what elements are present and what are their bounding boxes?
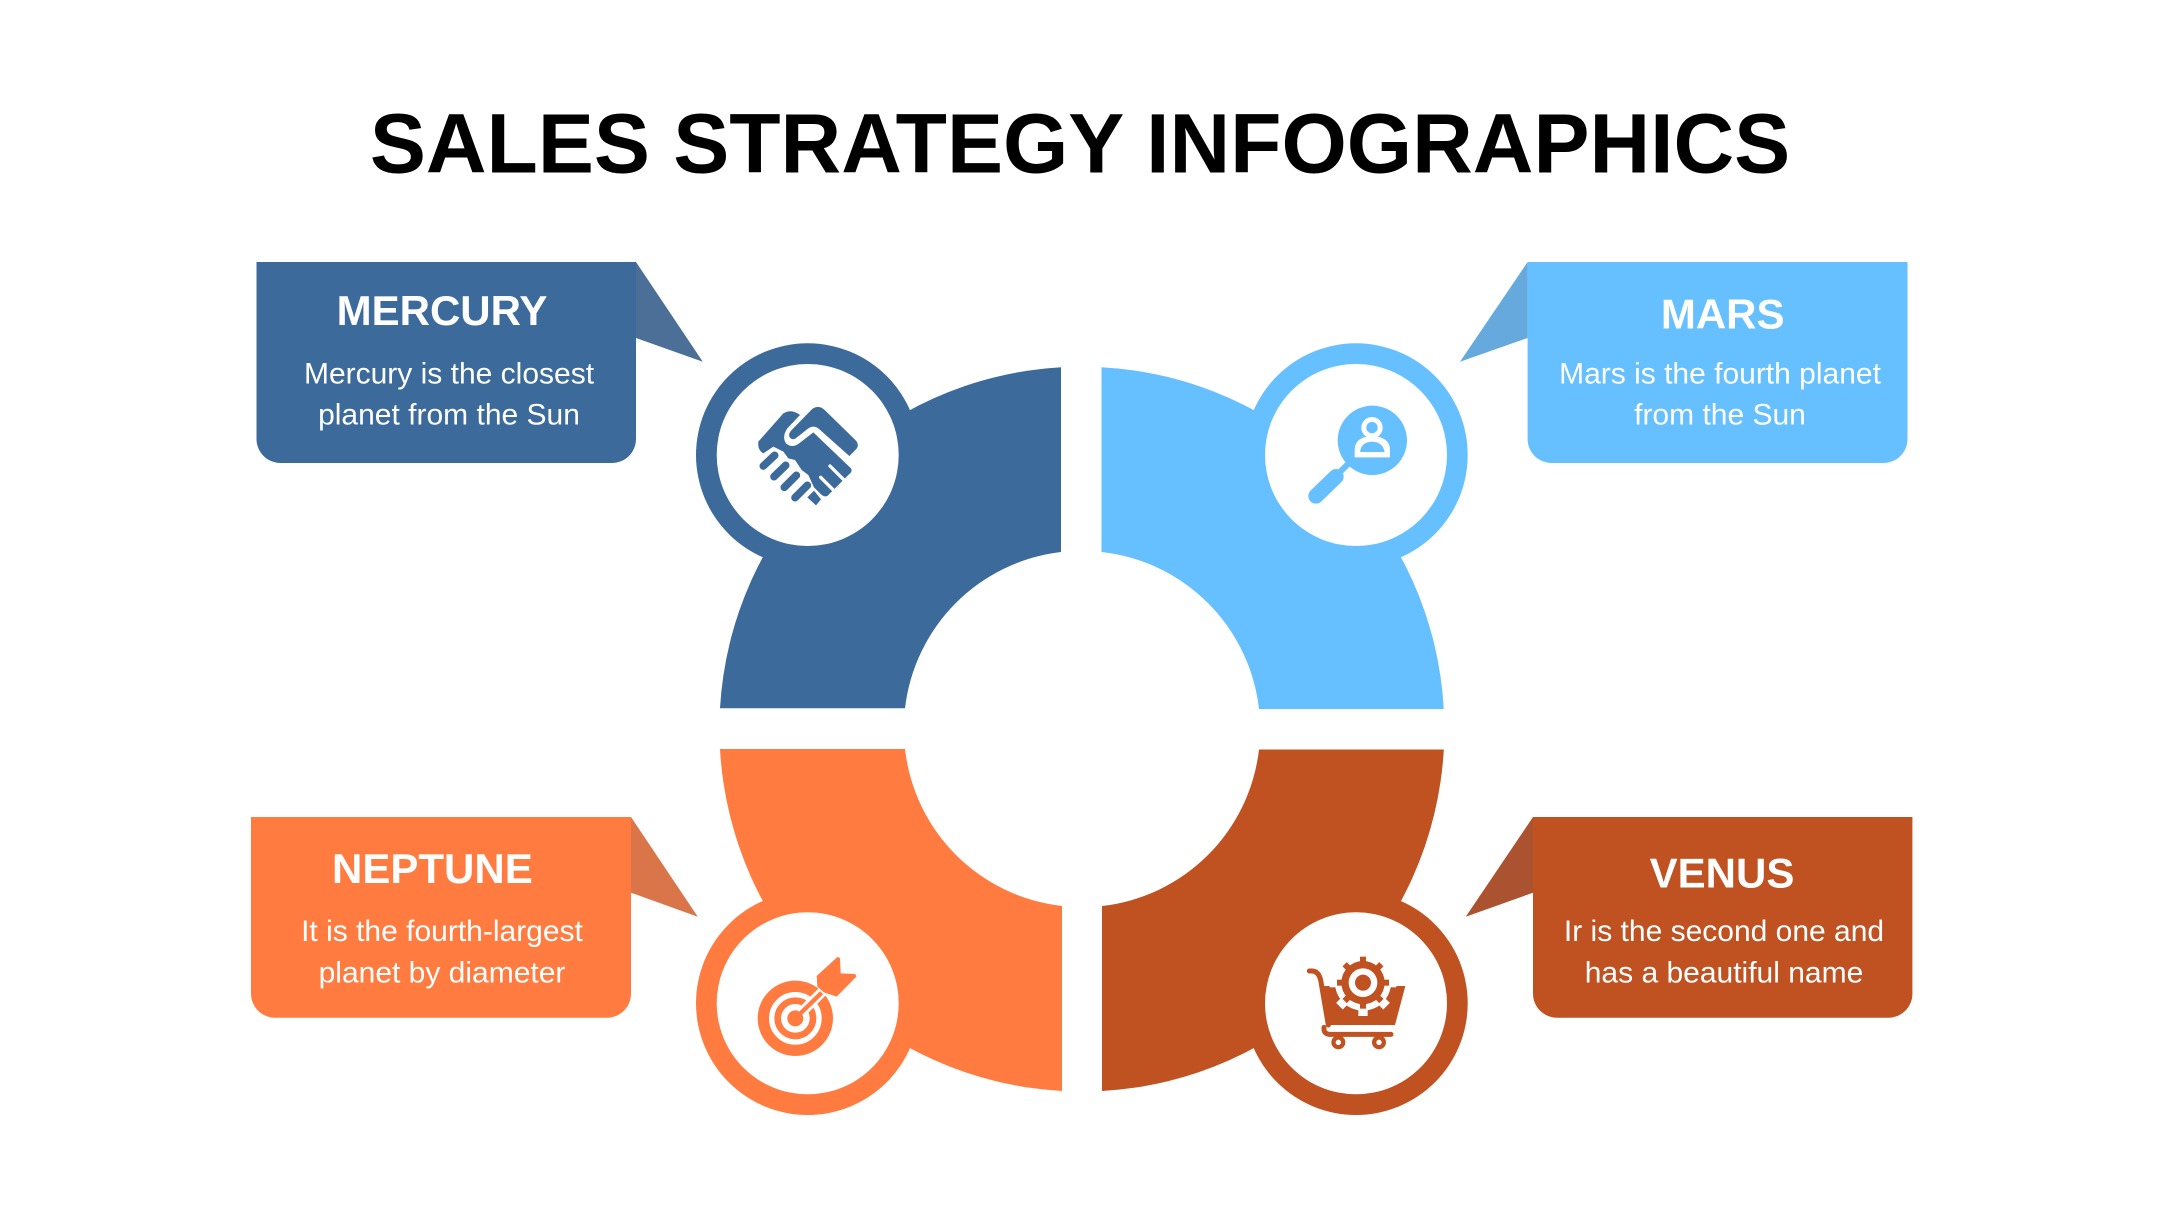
- icon ring: mercury: [696, 343, 919, 567]
- description: neptune: It is the fourth-largest: [301, 915, 584, 948]
- callout box: [1533, 817, 1912, 1018]
- description: mars: from the Sun: [1634, 398, 1806, 432]
- description: mercury: Mercury is the closest: [304, 357, 595, 390]
- icon ring: mars: [1244, 343, 1468, 567]
- icon ring: venus: [1244, 892, 1468, 1115]
- icon ring: neptune: [696, 892, 919, 1115]
- description: neptune: planet by diameter: [319, 956, 565, 990]
- icon: magnifier with person: [1316, 406, 1407, 496]
- callout tail: [636, 262, 703, 362]
- callout box: [1528, 262, 1908, 463]
- callout: mars: [1460, 262, 1908, 463]
- description: venus: Ir is the second one and: [1564, 915, 1884, 948]
- icon: handshake: [758, 407, 858, 505]
- icon: target with arrow: [758, 957, 856, 1056]
- description: venus: has a beautiful name: [1585, 956, 1863, 990]
- heading: neptune: NEPTUNE: [332, 845, 533, 892]
- quadrant: neptune: [720, 749, 1062, 1091]
- heading: mercury: MERCURY: [337, 287, 547, 334]
- heading: mars: MARS: [1661, 290, 1785, 338]
- callout: venus: [1466, 817, 1912, 1018]
- heading: venus: VENUS: [1650, 850, 1794, 896]
- quadrant: venus: [1102, 750, 1444, 1091]
- icon: cart with gear: [1309, 949, 1405, 1049]
- quadrant: mercury: [720, 367, 1061, 708]
- description: mercury: planet from the Sun: [318, 398, 580, 432]
- title: SALES STRATEGY INFOGRAPHICS: [370, 97, 1790, 191]
- callout tail: [1466, 817, 1533, 917]
- panel: mercury: [256, 262, 1061, 708]
- quadrant: mars: [1102, 367, 1444, 709]
- callout: neptune: [251, 817, 698, 1018]
- panel: neptune: [251, 749, 1062, 1115]
- callout box: [251, 817, 631, 1018]
- callout box: [256, 262, 636, 463]
- panel: venus: [1102, 750, 1912, 1115]
- description: mars: Mars is the fourth planet: [1559, 357, 1882, 390]
- callout tail: [1460, 262, 1528, 362]
- callout: mercury: [256, 262, 703, 463]
- callout tail: [631, 817, 698, 917]
- panel: mars: [1102, 262, 1908, 709]
